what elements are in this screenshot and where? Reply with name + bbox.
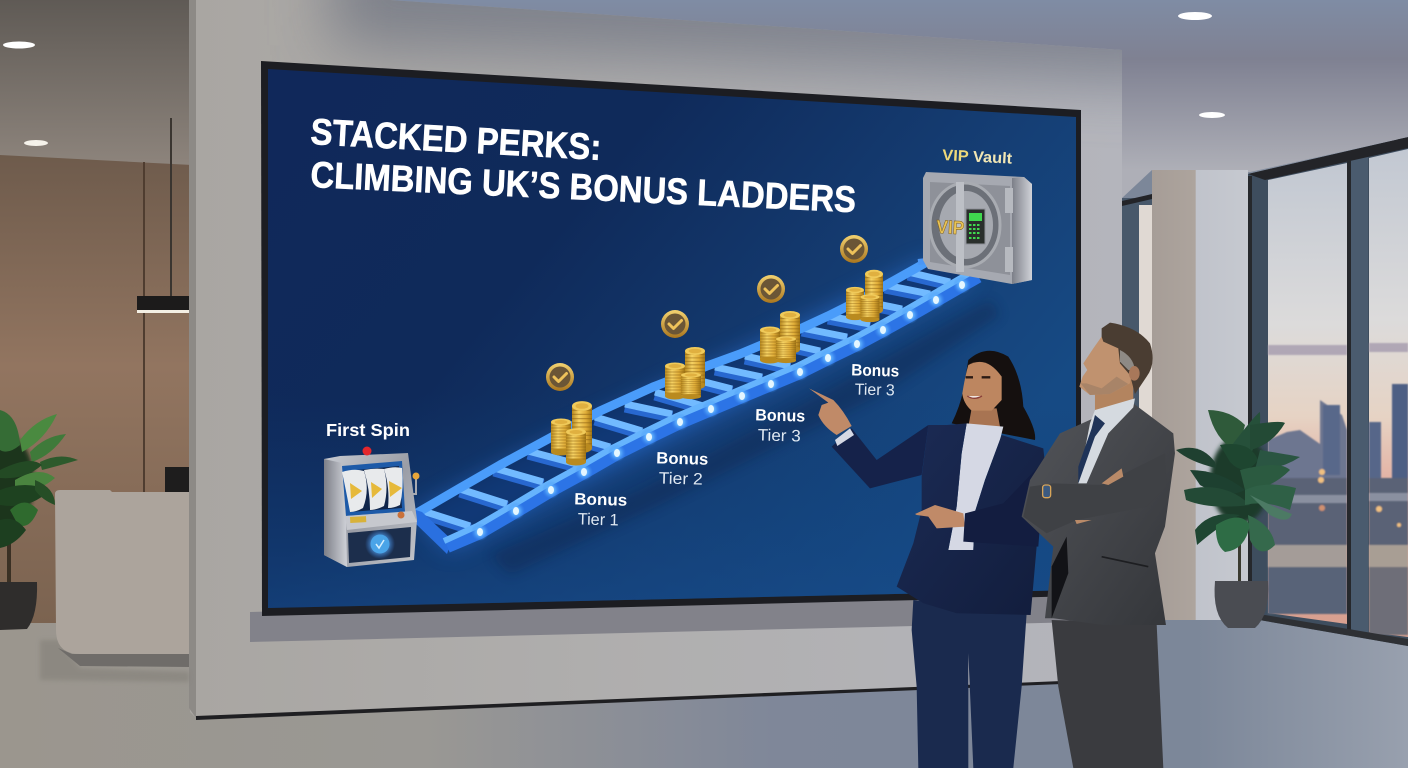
label: bonus tier 2 <box>656 449 709 489</box>
plant: left <box>0 410 78 630</box>
glass right <box>1369 149 1408 637</box>
hair <box>1102 323 1153 394</box>
lower hand <box>1075 520 1092 524</box>
watch <box>1043 485 1051 498</box>
ceiling light: right <box>1178 12 1212 20</box>
label: bonus tier 1 <box>574 490 627 530</box>
left floor shadow <box>40 640 189 682</box>
left lobby ceiling <box>0 0 192 165</box>
coins: stack cluster 3 <box>760 311 800 364</box>
glowing check <box>365 529 395 559</box>
label: bonus tier 3 right <box>851 361 899 400</box>
lower panel <box>348 527 411 563</box>
hair <box>952 351 1035 440</box>
title <box>310 111 857 220</box>
label: bonus tier 2: Bonus <box>656 449 709 469</box>
face <box>962 362 1002 411</box>
lower hand <box>915 505 965 528</box>
red button <box>362 446 372 456</box>
right ceiling <box>380 0 1408 198</box>
cuff <box>835 428 854 446</box>
screen frame <box>261 61 1081 616</box>
pendant lamp <box>137 118 189 313</box>
hinges <box>1005 188 1013 213</box>
ladder floor shadow <box>490 300 1000 575</box>
pointing arm <box>832 425 928 488</box>
crossed hand <box>1102 468 1123 485</box>
wheel ring <box>930 183 1000 267</box>
label: VIP vault: VIP Vault <box>942 147 1013 168</box>
rail lights <box>471 276 971 541</box>
wall baseline <box>196 681 1062 720</box>
jacket body <box>897 423 1045 615</box>
ladder: first spin to VIP vault <box>413 260 978 554</box>
vault door <box>930 182 1010 275</box>
icon: VIP vault <box>923 172 1032 284</box>
man presenter <box>1022 323 1175 768</box>
shirt and collar <box>1078 398 1135 483</box>
skyline <box>1268 343 1408 635</box>
column <box>1152 170 1248 620</box>
badge: check 2 <box>661 310 689 338</box>
rungs <box>423 272 950 526</box>
screen surface <box>268 69 1076 608</box>
neck <box>968 408 1000 447</box>
control deck <box>345 511 417 530</box>
pot <box>1215 581 1268 628</box>
coins: stack cluster 4 <box>846 270 883 322</box>
reel window <box>342 461 405 516</box>
far end cap <box>918 260 978 273</box>
label: bonus tier 3 left: Tier 3 <box>758 426 801 446</box>
title line 1: STACKED PERKS: <box>310 111 602 168</box>
grey temple <box>1120 350 1135 370</box>
mullion <box>1348 153 1368 635</box>
ladder bed <box>417 262 978 546</box>
tie <box>1078 415 1105 483</box>
label: bonus tier 2: Tier 2 <box>659 469 703 489</box>
trousers <box>1052 620 1163 768</box>
label: first spin: First Spin <box>326 420 410 440</box>
main wall <box>190 0 1122 718</box>
reception desk with monitor <box>55 467 189 667</box>
neck <box>1095 377 1133 415</box>
vault VIP text: VIP <box>936 217 965 239</box>
pot <box>0 582 37 630</box>
pocket flap <box>1102 557 1148 567</box>
badge: check 3 <box>757 275 785 303</box>
reel symbols <box>350 483 362 499</box>
reels <box>342 470 367 512</box>
lower sleeve <box>963 460 1045 547</box>
face <box>1079 337 1133 395</box>
eyes and mouth <box>966 374 990 381</box>
ceiling light: far left <box>3 42 35 48</box>
small window <box>1122 198 1154 628</box>
wall top shading <box>330 0 1180 85</box>
panel: wall-mounted display <box>261 61 1081 616</box>
machine body <box>324 453 417 567</box>
vault body <box>923 172 1032 284</box>
small window top frame <box>1122 194 1152 206</box>
plant: right <box>1176 410 1300 628</box>
wood panel wall <box>0 155 192 623</box>
label: bonus tier 3 right: Tier 3 <box>855 381 895 400</box>
jacket <box>1022 403 1175 625</box>
label: bonus tier 1: Bonus <box>574 490 627 510</box>
coins: stack cluster 2 <box>665 347 705 400</box>
icon: slot machine <box>324 446 420 567</box>
ladder glow <box>417 262 977 550</box>
label: bonus tier 1: Tier 1 <box>578 510 619 529</box>
ceiling light: right lower <box>1199 112 1225 118</box>
badge: check 4 <box>840 235 868 263</box>
label: bonus tier 3 right: Bonus <box>851 361 899 381</box>
shirt <box>948 423 1003 550</box>
ceiling light: left lower <box>24 140 48 146</box>
door edge <box>956 182 964 272</box>
stubble shadow <box>1081 377 1128 395</box>
ear <box>1129 366 1140 381</box>
title line 2: CLIMBING UK’S BONUS LADDERS <box>310 154 857 220</box>
big window frame <box>1248 137 1408 646</box>
keypad <box>966 209 985 244</box>
trousers <box>912 600 1027 768</box>
coins: stack cluster 1 <box>551 401 592 466</box>
glass left <box>1268 163 1347 624</box>
rung shadows <box>423 275 950 529</box>
label: bonus tier 3 left <box>755 406 805 446</box>
near end cap <box>413 509 452 554</box>
pointing hand <box>809 388 852 435</box>
shadow fold <box>1052 537 1068 618</box>
arm fold <box>1023 453 1167 533</box>
wall shadow under screen <box>250 592 1081 642</box>
lever <box>413 476 416 494</box>
label: bonus tier 3 left: Bonus <box>755 406 805 426</box>
woman presenter <box>809 351 1045 768</box>
badge: check 1 <box>546 363 574 391</box>
lower rail top <box>444 270 975 541</box>
lower rail side <box>447 276 978 546</box>
upper rail <box>417 262 927 513</box>
